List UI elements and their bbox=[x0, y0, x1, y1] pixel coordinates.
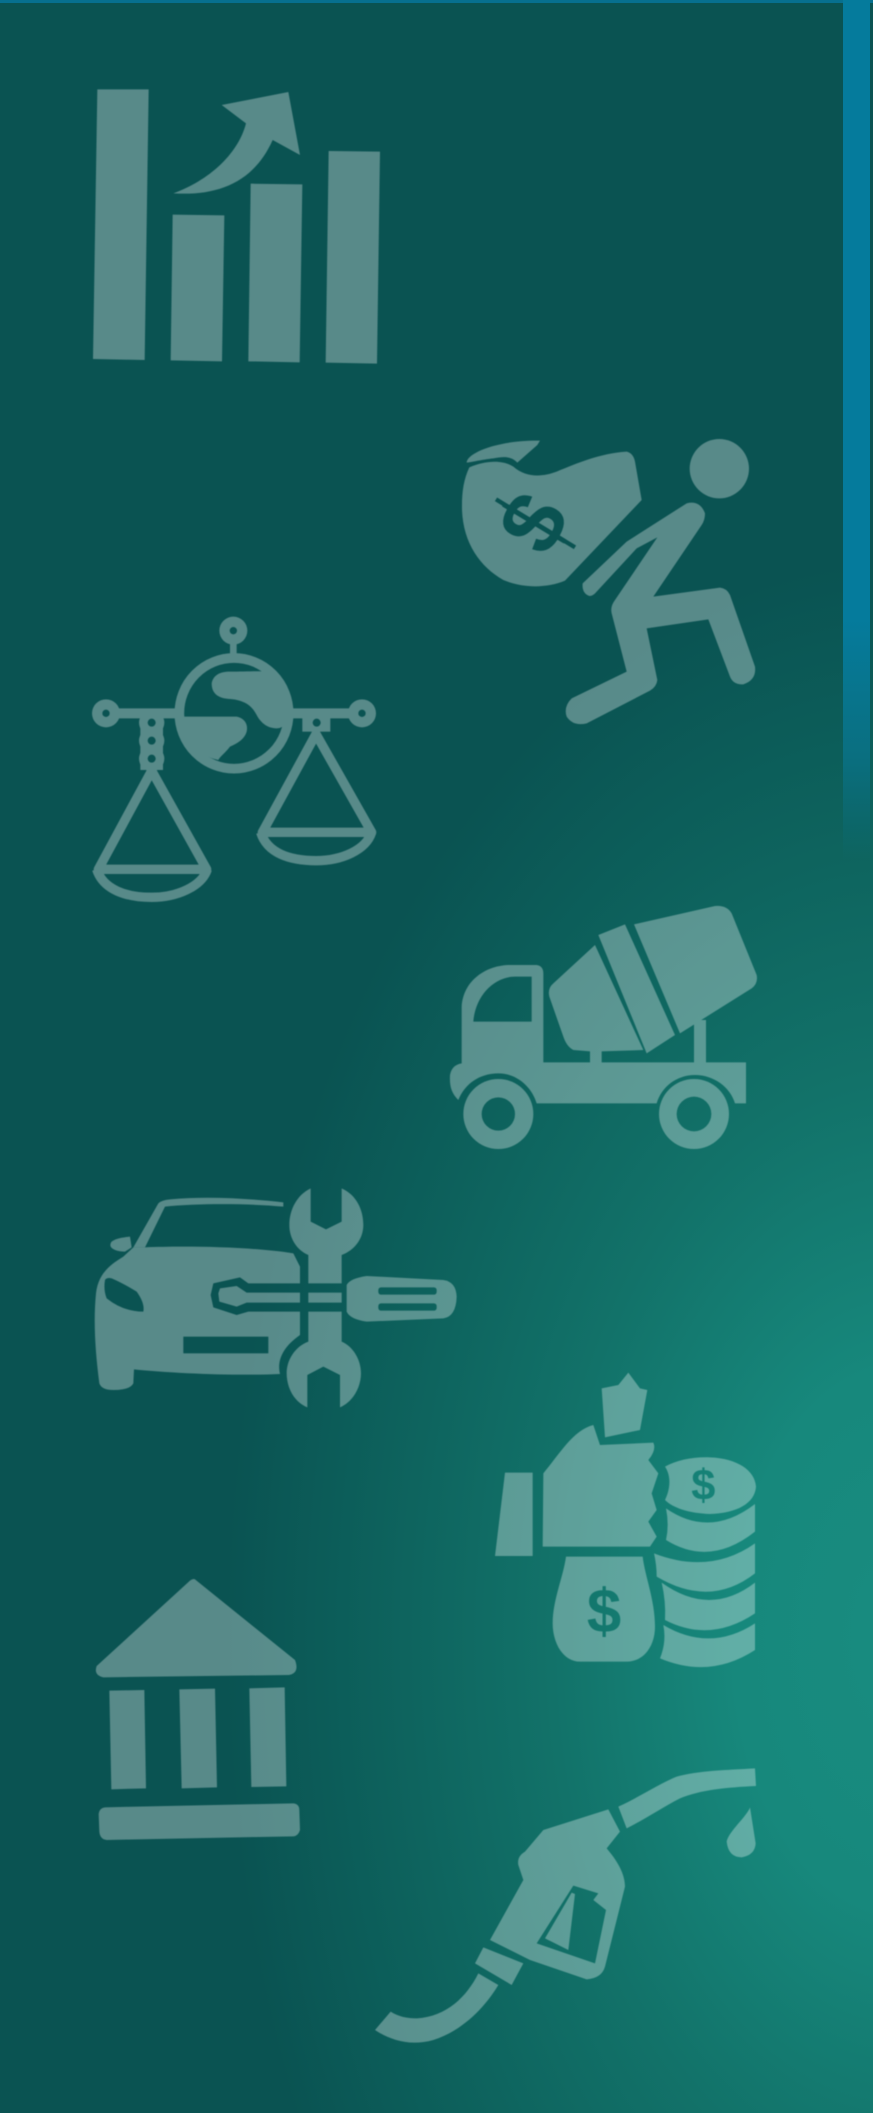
icon: fuel pump nozzle with drop bbox=[375, 1768, 756, 2043]
icon: hand with money bag and coin stack bbox=[495, 1373, 756, 1667]
icon: car with wrench and screwdriver bbox=[95, 1188, 457, 1407]
icon: running man carrying money bag bbox=[462, 439, 755, 724]
icon: cement mixer truck bbox=[450, 906, 757, 1149]
top blue strip bbox=[0, 0, 873, 3]
icon: bar chart with rising arrow bbox=[93, 89, 380, 364]
icon: bank building bbox=[96, 1579, 300, 1840]
icon: scales with globe bbox=[92, 617, 376, 897]
right blue vertical band bbox=[843, 0, 870, 860]
